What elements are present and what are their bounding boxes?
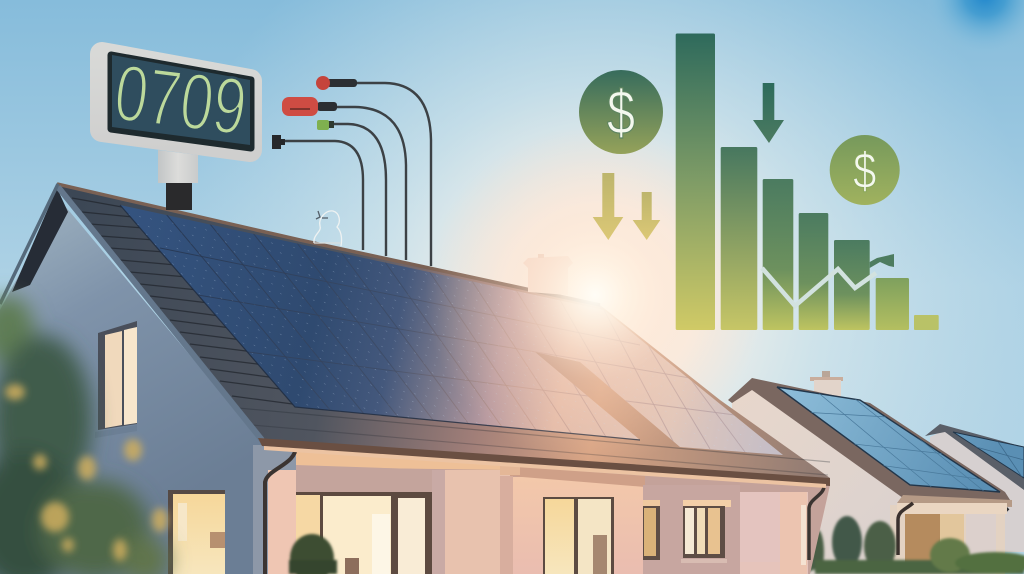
walls xyxy=(732,386,910,574)
wide column xyxy=(513,477,643,574)
trend arrow head xyxy=(870,254,894,268)
centre window xyxy=(543,497,614,574)
dark gable soffit xyxy=(12,188,68,292)
meter bezel xyxy=(102,54,250,150)
icon: small dollar coin: $ xyxy=(853,142,876,199)
arrow: gold down large xyxy=(593,173,623,240)
lower window xyxy=(168,490,225,574)
solar panels xyxy=(777,387,1000,492)
meter pole xyxy=(166,180,192,210)
wall between door and column xyxy=(432,470,513,574)
chimney xyxy=(810,371,843,398)
chimney on main roof xyxy=(523,254,573,295)
roof surface with tiles xyxy=(57,183,830,484)
blurred foreground tree xyxy=(0,296,169,574)
icon: bird outline xyxy=(314,211,342,246)
cable: green probe xyxy=(317,120,386,256)
tile courses xyxy=(72,198,830,475)
patio door xyxy=(296,492,432,574)
ridge cap xyxy=(57,184,600,305)
cable: black connector xyxy=(272,135,363,250)
arrow: dark green down xyxy=(753,83,784,143)
digital meter sign xyxy=(102,47,252,210)
right columns xyxy=(740,492,808,574)
shrubs in front of neighbours xyxy=(742,516,1024,574)
icon: large dollar coin xyxy=(579,70,663,154)
meter screen frame xyxy=(111,55,251,148)
meter reading: 0709 xyxy=(110,47,252,152)
rake board xyxy=(58,187,262,440)
sensor cables xyxy=(272,76,431,266)
panel seams xyxy=(160,214,745,452)
arrow: gold down small xyxy=(633,192,660,240)
house: second neighbour xyxy=(728,371,1012,574)
downpipe xyxy=(898,503,913,555)
main roof xyxy=(0,183,830,488)
icon: large dollar coin: $ xyxy=(607,79,635,148)
right wing wall xyxy=(643,485,740,574)
bar chart: falling costs xyxy=(676,34,939,330)
small right window xyxy=(681,506,727,563)
upper window xyxy=(95,321,137,438)
sun glare xyxy=(400,130,800,480)
cable: red cylinder probe xyxy=(282,97,406,260)
porch ceiling / back wall xyxy=(253,445,830,574)
meter bracket xyxy=(158,150,198,183)
gable wall xyxy=(0,200,265,574)
icon: small dollar coin xyxy=(830,135,900,205)
solar array on main roof xyxy=(120,204,783,455)
meter screen xyxy=(112,55,250,145)
small left window xyxy=(643,506,660,560)
house: third neighbour at far right xyxy=(925,424,1024,552)
trend line xyxy=(762,268,876,306)
roof xyxy=(728,378,1012,503)
main house body and front xyxy=(0,188,830,574)
entrance shrub xyxy=(289,534,337,574)
cable: red round probe xyxy=(316,76,431,266)
eave gutter xyxy=(258,438,830,486)
downpipes xyxy=(265,446,296,574)
